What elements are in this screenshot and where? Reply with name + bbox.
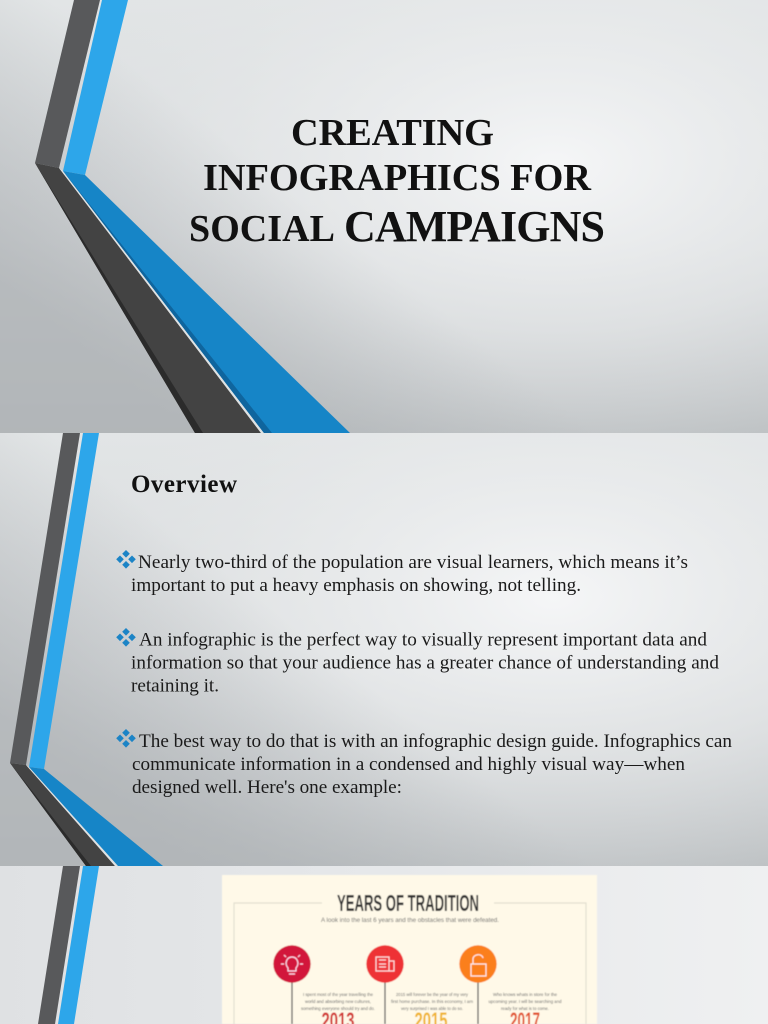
title: INFOGRAPHICS FOR <box>203 157 592 199</box>
column 2017: Who knows whats in store for the <box>493 992 557 997</box>
column 2015: 2015 will forever be the year of my very <box>396 992 469 997</box>
icon: diamond bullet <box>116 628 136 647</box>
heading: overview: Overview <box>131 471 237 498</box>
panel: overview slide <box>0 433 768 866</box>
column 2015 <box>391 992 473 1024</box>
title: CREATING <box>291 112 494 154</box>
column 2017 <box>488 992 562 1024</box>
bullet 3 <box>116 729 732 798</box>
bullet 2: retaining it. <box>131 676 219 697</box>
icon: red lightbulb <box>273 945 311 983</box>
bullet 2: information so that your audience has a greater chance of understanding and <box>131 653 719 674</box>
column 2015: very surprised I was able to do so. <box>401 1006 463 1011</box>
title <box>189 112 605 251</box>
icon: diamond bullet <box>116 729 136 748</box>
infographic subtitle: A look into the last 6 years and the obstacles that were defeated. <box>321 917 499 924</box>
ribbons <box>38 866 99 1024</box>
bullet 1: important to put a heavy emphasis on showing, not telling. <box>131 575 581 596</box>
infographic card <box>222 875 597 1024</box>
column 2013: something everyone should try and do. <box>301 1006 375 1011</box>
icon: open padlock <box>459 945 497 983</box>
bullet 1 <box>116 550 688 596</box>
column 2015: first home purchase. In this economy, I am <box>391 999 473 1004</box>
bullet 3: communicate information in a condensed and highly visual way—when <box>132 754 685 775</box>
column 2013: I spent most of the year travelling the <box>303 992 373 997</box>
chevron: grey and blue ribbons <box>10 433 163 866</box>
chevron: grey and blue ribbons <box>35 0 350 433</box>
panel: title slide <box>0 0 768 433</box>
column 2017: ready for what is to come. <box>501 1006 549 1011</box>
bullet 2: An infographic is the perfect way to visually represent important data and <box>139 630 707 651</box>
bullet 3: designed well. Here's one example: <box>132 777 402 798</box>
bullet 2 <box>116 628 719 697</box>
icon: diamond bullet <box>116 550 136 569</box>
column 2013: world and absorbing new cultures, <box>305 999 371 1004</box>
bullet 1: Nearly two-third of the population are visual learners, which means it’s <box>138 552 688 573</box>
title: CAMPAIGNS <box>344 202 605 251</box>
frame <box>234 903 586 1024</box>
panel: example slide <box>0 866 768 1024</box>
timeline lines <box>292 982 478 1024</box>
title: SOCIAL <box>189 208 335 250</box>
column 2013 <box>301 992 375 1024</box>
bullet 3: The best way to do that is with an infographic design guide. Infographics can <box>139 731 732 752</box>
icon: newspaper <box>366 945 404 983</box>
column 2017: upcoming year. I will be searching and <box>488 999 562 1004</box>
infographic title: YEARS OF TRADITION <box>337 890 479 916</box>
